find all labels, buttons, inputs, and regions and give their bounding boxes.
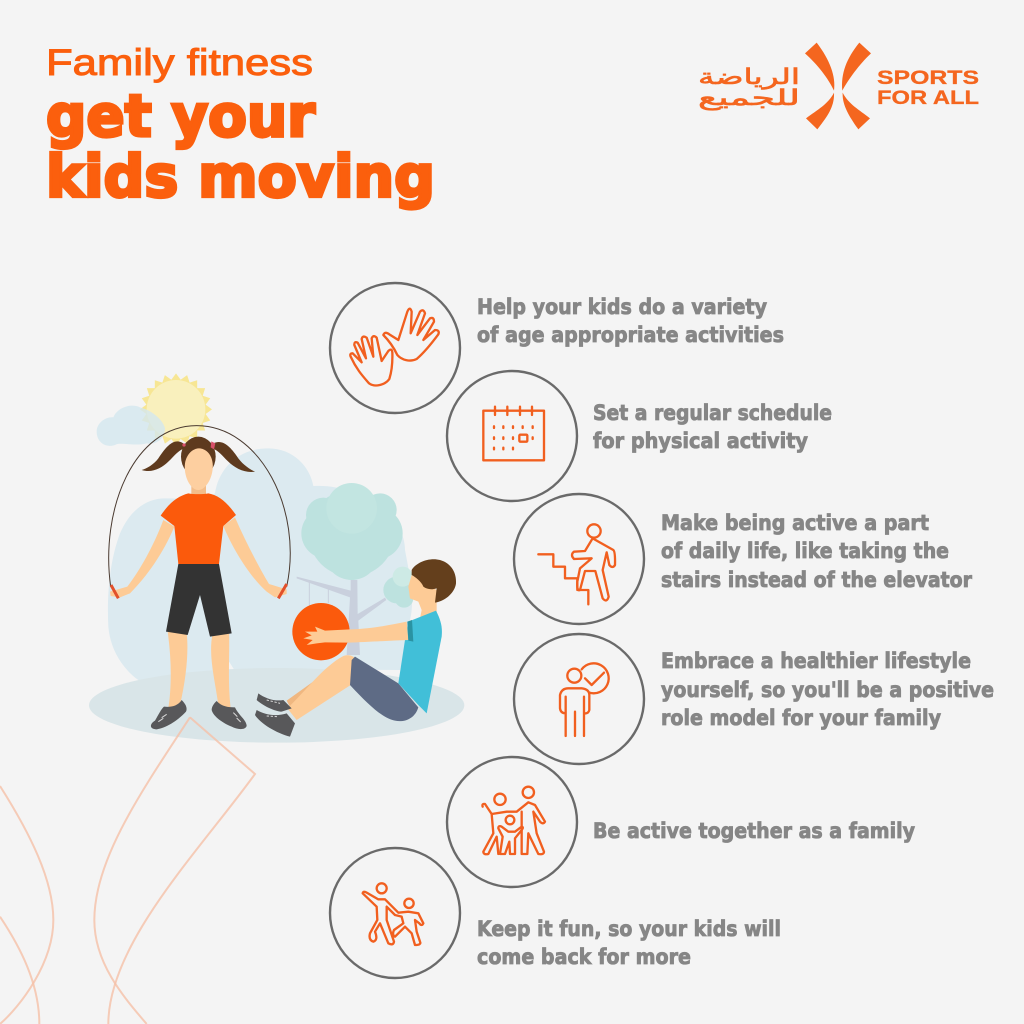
text: role model: role model for your family <box>661 706 941 730</box>
logo: Sports for All <box>698 43 979 129</box>
heading: get your kids moving <box>46 82 435 210</box>
text: regular schedule: Set a regular schedule <box>593 401 832 425</box>
icon: sun <box>140 373 212 445</box>
text: active together: Be active together as a family <box>593 819 915 843</box>
panel: keep it fun <box>330 848 781 978</box>
text: regular schedule <box>593 401 832 453</box>
logo: Sports for All: الرياضة <box>698 65 800 90</box>
icon: two hands <box>350 309 439 385</box>
panel: role model <box>514 634 994 764</box>
text: role model <box>661 649 994 730</box>
logo: Sports for All: FOR ALL <box>877 88 979 109</box>
title: Family fitness: Family fitness <box>46 41 313 83</box>
heading: get your kids moving: kids moving <box>46 142 435 210</box>
text: varied activities: Help your kids do a variety <box>477 295 767 319</box>
boy <box>255 559 456 737</box>
text: varied activities: of age appropriate activities <box>477 323 784 347</box>
text: daily life: of daily life, like taking the <box>661 539 949 563</box>
ground ellipse <box>89 668 464 743</box>
text: varied activities <box>477 295 784 347</box>
logo: Sports for All: للجميع <box>698 86 800 111</box>
illustration: girl skipping rope and boy with ball <box>89 373 464 743</box>
icon: running parent and child <box>363 883 423 945</box>
decorative outline shapes <box>0 717 255 1024</box>
panel: daily life <box>514 494 973 624</box>
background clouds <box>108 448 412 680</box>
panel: regular schedule <box>447 371 832 501</box>
icon: person with check mark <box>560 663 609 736</box>
icon: family <box>482 787 545 854</box>
text: regular schedule: for physical activity <box>593 429 808 453</box>
heading: get your kids moving: get your <box>46 82 315 150</box>
logo: Sports for All: SPORTS <box>877 68 979 89</box>
panel: varied activities <box>330 283 784 413</box>
text: keep it fun: Keep it fun, so your kids will <box>477 917 781 941</box>
text: daily life: Make being active a part <box>661 511 929 535</box>
text: keep it fun <box>477 917 781 969</box>
icon: person climbing stairs <box>538 524 615 604</box>
girl <box>109 426 290 729</box>
text: daily life: stairs instead of the elevator <box>661 568 973 592</box>
text: role model: Embrace a healthier lifestyle <box>661 649 971 673</box>
small cloud <box>97 406 165 446</box>
text: keep it fun: come back for more <box>477 945 691 969</box>
text: role model: yourself, so you'll be a positive <box>661 678 994 702</box>
icon: calendar <box>483 407 544 460</box>
tree <box>297 483 413 655</box>
text: daily life <box>661 511 973 592</box>
panel: active together <box>447 757 915 887</box>
